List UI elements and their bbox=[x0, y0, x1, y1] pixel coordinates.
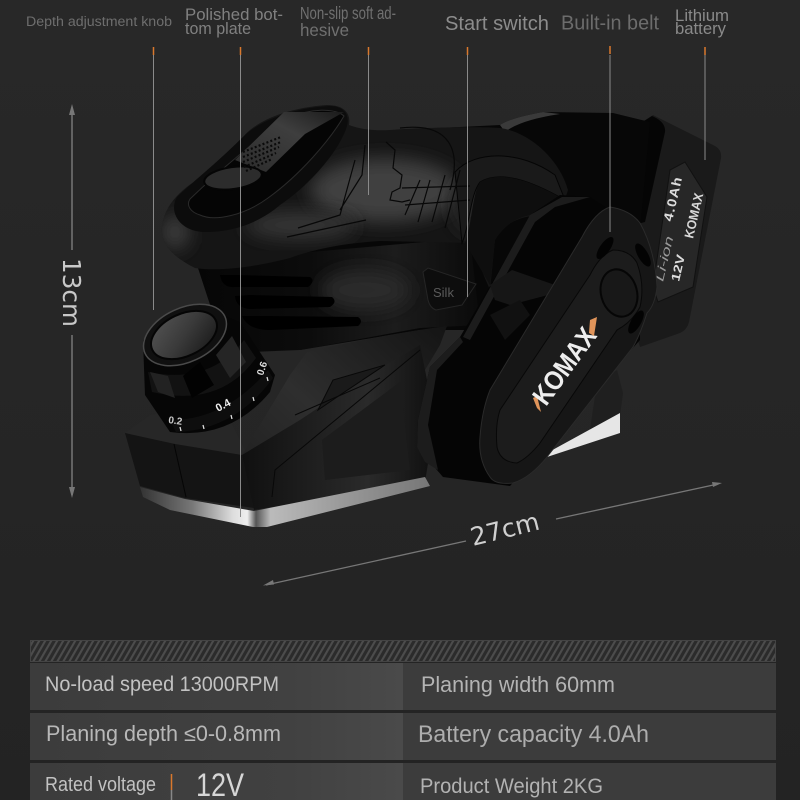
label: start switch: Start switch bbox=[445, 13, 549, 35]
upper housing and rear motor cover bbox=[200, 112, 650, 350]
spec row 1: Planing width 60mm bbox=[421, 672, 615, 697]
length dimension: 27cm: 27cm bbox=[467, 507, 542, 552]
spec row 1 bbox=[30, 663, 776, 710]
label: lithium battery bbox=[675, 7, 729, 38]
belt drive housing bbox=[417, 195, 640, 486]
depth adjustment knob bbox=[134, 292, 275, 433]
battery pack: Li-ion bbox=[652, 234, 676, 283]
height dimension: 13cm: 13cm bbox=[57, 258, 86, 327]
depth adjustment knob: 0.2 bbox=[168, 415, 183, 428]
nose cap with switch plate bbox=[174, 106, 348, 232]
label: lithium battery: Lithium bbox=[675, 7, 729, 25]
spec row 3: Product Weight 2KG bbox=[420, 775, 603, 798]
battery pack: 4.0Ah bbox=[660, 174, 685, 223]
battery pack: KOMAX bbox=[681, 191, 706, 240]
label: non-slip soft adhesive: hesive bbox=[300, 20, 349, 40]
logo: KOMAX: KOMAX bbox=[527, 322, 603, 411]
spec row 3 bbox=[30, 763, 776, 800]
icon: perforated grip dots bbox=[243, 137, 281, 171]
rubber grip handle bbox=[160, 105, 568, 290]
label: depth adjustment knob: Depth adjustment knob bbox=[26, 14, 172, 29]
neck with cooling fins bbox=[196, 238, 480, 352]
depth adjustment knob: 0.6 bbox=[255, 360, 270, 377]
spec row 2: Planing depth ≤0-0.8mm bbox=[46, 721, 281, 746]
product illustration: cordless planer bbox=[125, 105, 721, 527]
hatched table header bar bbox=[30, 640, 776, 662]
icon: drive pulley circle bbox=[595, 265, 643, 321]
label: built-in belt: Built-in belt bbox=[561, 12, 659, 34]
battery pack bbox=[625, 115, 721, 347]
callout leader lines with orange tips bbox=[154, 46, 705, 517]
label: non-slip soft adhesive: Non-slip soft ad- bbox=[300, 3, 396, 23]
length dimension: 27cm bbox=[263, 482, 722, 586]
depth adjustment knob: 0.4 bbox=[214, 396, 234, 415]
spec row 1: No-load speed 13000RPM bbox=[45, 673, 279, 696]
belt cover with logo bbox=[480, 207, 657, 483]
start switch button bbox=[423, 268, 476, 310]
belt housing ribs bbox=[417, 197, 590, 470]
label: non-slip soft adhesive bbox=[300, 3, 396, 40]
spec row 2: Battery capacity 4.0Ah bbox=[418, 721, 649, 748]
base left block bbox=[125, 400, 254, 508]
label: polished bottom plate: Polished bot- bbox=[185, 6, 283, 24]
start switch button: Silk bbox=[433, 285, 454, 300]
icon: switch button bbox=[203, 163, 263, 193]
planer blade end bbox=[547, 370, 623, 457]
label: polished bottom plate: tom plate bbox=[185, 20, 251, 38]
label: polished bottom plate bbox=[185, 6, 283, 38]
battery pack: 12V bbox=[668, 253, 688, 283]
specifications table bbox=[30, 640, 776, 800]
polished bottom plate bbox=[140, 477, 430, 527]
label: lithium battery: battery bbox=[675, 20, 727, 38]
spec row 2 bbox=[30, 713, 776, 760]
base wedge housing bbox=[242, 326, 447, 510]
icon: cover slots bbox=[593, 234, 654, 336]
height dimension: 13cm bbox=[57, 104, 86, 498]
spec row 3: Rated voltage bbox=[45, 774, 156, 796]
